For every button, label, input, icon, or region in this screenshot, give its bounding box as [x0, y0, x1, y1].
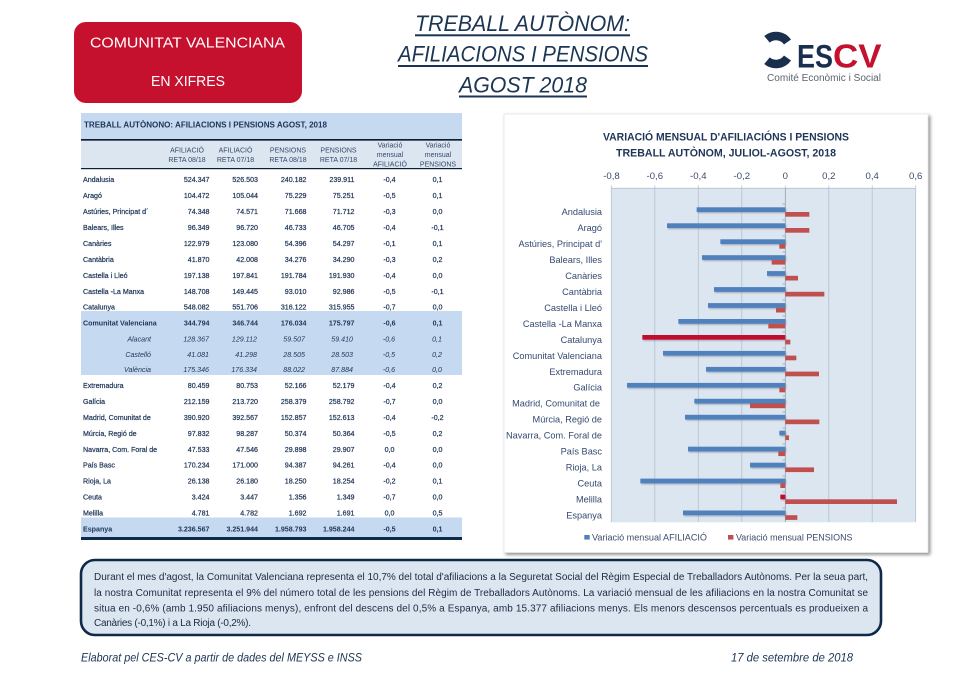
table rows: autonomous communities after Comunitat Valenciana: 3.424	[192, 493, 210, 501]
table rows: autonomous communities after Comunitat Valenciana: 4.782	[240, 509, 258, 517]
table rows: autonomous communities before Comunitat Valenciana: 0,0	[433, 304, 442, 312]
table rows: autonomous communities before Comunitat Valenciana: 96.720	[236, 224, 258, 232]
table rows: autonomous communities before Comunitat Valenciana: 0,0	[433, 208, 442, 216]
table rows: autonomous communities after Comunitat Valenciana: 0,0	[385, 446, 394, 454]
table rows: autonomous communities after Comunitat Valenciana: 0,0	[433, 461, 442, 469]
table rows: autonomous communities before Comunitat Valenciana: 149.445	[232, 288, 258, 296]
table rows: provinces: 59.410	[331, 335, 353, 343]
table rows: autonomous communities before Comunitat Valenciana: 96.349	[188, 224, 210, 232]
chart title: VARIACIÓ MENSUAL D'AFILIACIÓNS I PENSIONS	[603, 130, 849, 144]
table rows: autonomous communities after Comunitat Valenciana: 390.920	[184, 414, 210, 422]
table rows: autonomous communities before Comunitat Valenciana: 191.930	[329, 272, 355, 280]
title: TREBALL AUTÒNOM:	[415, 11, 630, 36]
callout: summary text: Canàries (-0,1%) i a La Rioja (-0,2%).	[94, 618, 251, 629]
table title band	[81, 113, 462, 139]
table row: Comunitat Valenciana	[83, 320, 442, 328]
x axis labels: 0,4	[866, 171, 880, 182]
table row: Espanya total: 1.958.793	[275, 525, 307, 533]
table rows: autonomous communities after Comunitat Valenciana: Extremadura	[83, 382, 124, 390]
table rows: autonomous communities after Comunitat Valenciana: 26.138	[188, 477, 210, 485]
table rows: autonomous communities after Comunitat Valenciana: 80.459	[188, 382, 210, 390]
table rows: autonomous communities before Comunitat Valenciana: 0,0	[433, 272, 442, 280]
table rows: autonomous communities before Comunitat Valenciana: 0,1	[433, 192, 442, 200]
table header row: RETA 07/18	[217, 157, 254, 164]
table row: Espanya total: 0,1	[433, 525, 442, 533]
table rows: autonomous communities after Comunitat Valenciana: 1.691	[337, 509, 355, 517]
table header row: PENSIONS	[420, 162, 456, 168]
table header row: Variació	[426, 142, 450, 150]
table rows: autonomous communities before Comunitat Valenciana: -0,5	[383, 288, 396, 296]
table row: Comunitat Valenciana: Comunitat Valenciana	[83, 320, 157, 328]
table row: Espanya total: Espanya	[83, 525, 112, 533]
x axis labels	[603, 171, 922, 182]
table rows: autonomous communities before Comunitat Valenciana: -0,3	[383, 208, 396, 216]
badge: Comunitat Valenciana en xifres: COMUNITAT VALENCIANA	[90, 36, 285, 52]
x axis labels: 0,6	[909, 171, 922, 182]
table header row: AFILIACIÓ	[373, 160, 407, 168]
chart legend: Variació mensual AFILIACIÓ	[592, 532, 707, 544]
table rows: autonomous communities after Comunitat Valenciana: 97.832	[188, 430, 210, 438]
table rows: autonomous communities after Comunitat Valenciana: Galícia	[83, 398, 105, 406]
category labels: Rioja, La	[566, 462, 603, 472]
table rows: autonomous communities after Comunitat Valenciana: 94.387	[285, 461, 307, 469]
table header row: RETA 08/18	[168, 157, 206, 164]
table header row: mensual	[377, 152, 404, 159]
callout: summary text: la nostra Comunitat representa el 9% del número total de les pensions del Règim de Treballadors Autònoms. La variació mensual de les afiliacions en la nostra Comunitat se	[94, 588, 868, 599]
table rows: autonomous communities before Comunitat Valenciana: 122.979	[184, 240, 210, 248]
table rows: autonomous communities after Comunitat Valenciana: 47.533	[188, 446, 210, 454]
table rows: autonomous communities before Comunitat Valenciana: -0,1	[431, 288, 444, 296]
table rows: autonomous communities after Comunitat Valenciana: Rioja, La	[83, 477, 111, 485]
table rows: autonomous communities after Comunitat Valenciana: -0,7	[383, 398, 396, 406]
table rows: autonomous communities after Comunitat Valenciana: 1.356	[289, 493, 307, 501]
table rows: autonomous communities before Comunitat Valenciana: 197.841	[232, 272, 258, 280]
table rows: autonomous communities before Comunitat Valenciana: -0,1	[383, 240, 396, 248]
table row: Comunitat Valenciana: 344.794	[184, 320, 210, 328]
table rows: provinces: 87.884	[331, 366, 353, 374]
table rows: provinces	[124, 335, 442, 374]
panel: data table	[81, 113, 462, 540]
category labels: Múrcia, Regió de	[533, 414, 602, 424]
table rows: autonomous communities after Comunitat Valenciana: 152.857	[281, 414, 307, 422]
table rows: autonomous communities after Comunitat Valenciana: 258.792	[329, 398, 355, 406]
table rows: autonomous communities after Comunitat Valenciana: Madrid, Comunitat de	[83, 414, 151, 422]
table rows: autonomous communities after Comunitat Valenciana: -0,4	[383, 461, 396, 469]
table row: Espanya total: 1.958.244	[323, 525, 355, 533]
table rows: autonomous communities before Comunitat Valenciana: 75.251	[333, 192, 355, 200]
table header row: AFILIACIÓ	[219, 146, 253, 154]
table rows: autonomous communities before Comunitat Valenciana: 54.297	[333, 240, 355, 248]
table rows: autonomous communities before Comunitat Valenciana: Canàries	[83, 240, 112, 248]
table rows: autonomous communities before Comunitat Valenciana: 74.348	[188, 208, 210, 216]
table rows: autonomous communities before Comunitat Valenciana: Balears, Illes	[83, 224, 124, 232]
table rows: autonomous communities before Comunitat Valenciana: 240.182	[281, 176, 307, 184]
table rows: autonomous communities after Comunitat Valenciana: 3.447	[240, 493, 258, 501]
table rows: autonomous communities after Comunitat Valenciana: -0,4	[383, 382, 396, 390]
category labels: Cantàbria	[562, 287, 603, 297]
table rows: autonomous communities after Comunitat Valenciana: 94.261	[333, 461, 355, 469]
table rows: autonomous communities after Comunitat Valenciana	[83, 382, 444, 517]
badge: Comunitat Valenciana en xifres	[74, 22, 302, 103]
table rows: autonomous communities before Comunitat Valenciana: 148.708	[184, 288, 210, 296]
table rows: autonomous communities before Comunitat Valenciana: 548.082	[184, 304, 210, 312]
table rows: autonomous communities before Comunitat Valenciana: 0,2	[433, 256, 442, 264]
table rows: provinces: Castelló	[125, 351, 151, 359]
table rows: autonomous communities after Comunitat Valenciana: 170.234	[184, 461, 210, 469]
category labels: Catalunya	[561, 335, 603, 345]
table rows: autonomous communities after Comunitat Valenciana: 18.250	[285, 477, 307, 485]
table rows: provinces: -0,6	[383, 335, 395, 343]
table rows: autonomous communities before Comunitat Valenciana: Cantàbria	[83, 256, 114, 264]
bars: variació mensual afiliació	[627, 207, 785, 515]
table rows: autonomous communities after Comunitat Valenciana: 258.379	[281, 398, 307, 406]
chart legend: Variació mensual PENSIONS	[736, 532, 852, 544]
title	[396, 11, 648, 98]
footer: source note: Elaborat pel CES-CV a partir de dades del MEYSS e INSS	[81, 652, 362, 664]
table header row: mensual	[425, 152, 452, 159]
table rows: autonomous communities before Comunitat Valenciana: -0,4	[383, 224, 396, 232]
table row: Espanya total: -0,5	[383, 525, 396, 533]
table rows: autonomous communities after Comunitat Valenciana: 212.159	[184, 398, 210, 406]
table header row	[81, 139, 462, 169]
table rows: provinces: 0,2	[432, 351, 442, 359]
table rows: autonomous communities after Comunitat Valenciana: 98.287	[236, 430, 258, 438]
table rows: provinces: València	[124, 366, 151, 374]
table rows: autonomous communities before Comunitat Valenciana: 34.276	[285, 256, 307, 264]
table rows: provinces: 28.503	[330, 351, 353, 359]
table rows: autonomous communities after Comunitat Valenciana: 52.166	[285, 382, 307, 390]
table rows: autonomous communities after Comunitat Valenciana: Melilla	[83, 509, 103, 517]
table rows: autonomous communities after Comunitat Valenciana: Navarra, Com. Foral de	[83, 446, 157, 454]
table rows: autonomous communities before Comunitat Valenciana: 316.122	[281, 304, 307, 312]
table rows: autonomous communities after Comunitat Valenciana: 26.180	[236, 477, 258, 485]
title: AGOST 2018	[457, 72, 587, 97]
table rows: provinces: 41.298	[235, 351, 257, 359]
table row: Comunitat Valenciana: 0,1	[433, 320, 442, 328]
category labels: Castella i Lleó	[544, 303, 602, 313]
x axis labels: -0,2	[734, 171, 750, 182]
table rows: autonomous communities after Comunitat Valenciana: -0,5	[383, 430, 396, 438]
category labels: Canàries	[565, 271, 602, 281]
table rows: autonomous communities after Comunitat Valenciana: 80.753	[236, 382, 258, 390]
table rows: autonomous communities before Comunitat Valenciana: 526.503	[232, 176, 258, 184]
table rows: autonomous communities after Comunitat Valenciana: 50.364	[333, 430, 355, 438]
category labels: País Basc	[561, 446, 602, 456]
table rows: autonomous communities before Comunitat Valenciana: 123.080	[232, 240, 258, 248]
table rows: provinces: 0,0	[432, 366, 442, 374]
table rows: autonomous communities before Comunitat Valenciana: Astúries, Principat d´	[83, 208, 148, 216]
table rows: autonomous communities before Comunitat Valenciana: 0,1	[433, 240, 442, 248]
table rows: autonomous communities before Comunitat Valenciana: Andalusia	[83, 176, 114, 184]
table header row: PENSIONS	[270, 148, 306, 154]
table rows: autonomous communities after Comunitat Valenciana: 0,0	[385, 509, 394, 517]
table row: Comunitat Valenciana: -0,6	[383, 320, 396, 328]
table rows: autonomous communities after Comunitat Valenciana: 29.907	[333, 446, 355, 454]
table rows: autonomous communities before Comunitat Valenciana: 239.911	[329, 176, 355, 184]
chart legend	[584, 532, 852, 544]
category labels: Castella -La Manxa	[523, 319, 603, 329]
callout: summary text	[81, 560, 881, 635]
table rows: autonomous communities after Comunitat Valenciana: 0,1	[433, 477, 442, 485]
table rows: autonomous communities before Comunitat Valenciana: 74.571	[236, 208, 258, 216]
table rows: autonomous communities before Comunitat Valenciana: 0,1	[433, 176, 442, 184]
table rows: autonomous communities after Comunitat Valenciana: 0,2	[433, 430, 442, 438]
table rows: autonomous communities after Comunitat Valenciana: 29.898	[285, 446, 307, 454]
category labels: Comunitat Valenciana	[513, 351, 603, 361]
table row: Comunitat Valenciana: 175.797	[329, 320, 355, 328]
table rows: provinces: 175.346	[183, 366, 209, 374]
table rows: autonomous communities before Comunitat Valenciana: 34.290	[333, 256, 355, 264]
table row: Espanya total: 3.251.944	[226, 525, 258, 533]
table rows: autonomous communities after Comunitat Valenciana: 0,0	[433, 493, 442, 501]
callout: summary text: situa en -0,6% (amb 1.950 afiliacions menys), enfront del descens del 0,5% a Espanya, amb 15.377 afiliacions menys. Els menors descensos percentuals es produeixen a	[94, 604, 868, 614]
table rows: provinces: 59.507	[283, 335, 306, 343]
logo: CES-CV: Comité Econòmic i Social	[767, 73, 881, 84]
table rows: autonomous communities after Comunitat Valenciana: 1.692	[289, 509, 307, 517]
table rows: autonomous communities before Comunitat Valenciana: Castella i Lleó	[83, 272, 128, 280]
table rows: provinces: 41.081	[187, 351, 209, 359]
table rows: autonomous communities after Comunitat Valenciana: 0,2	[433, 382, 442, 390]
table rows: autonomous communities before Comunitat Valenciana: -0,3	[383, 256, 396, 264]
table row: Comunitat Valenciana: 346.744	[232, 320, 258, 328]
bars: variació mensual pensions	[750, 212, 897, 520]
table header row: AFILIACIÓ	[170, 146, 204, 154]
table rows: autonomous communities after Comunitat Valenciana: 1.349	[337, 493, 355, 501]
table rows: autonomous communities after Comunitat Valenciana: 0,0	[433, 398, 442, 406]
table rows: autonomous communities after Comunitat Valenciana: -0,4	[383, 414, 396, 422]
table rows: provinces: -0,6	[383, 366, 395, 374]
table rows: autonomous communities after Comunitat Valenciana: 392.567	[232, 414, 258, 422]
table rows: autonomous communities before Comunitat Valenciana: 46.733	[285, 224, 307, 232]
table rows: autonomous communities before Comunitat Valenciana: 42.008	[236, 256, 258, 264]
table highlight bands	[81, 311, 462, 537]
table rows: autonomous communities after Comunitat Valenciana: 50.374	[285, 430, 307, 438]
table rows: provinces: Alacant	[126, 335, 152, 343]
category labels: Navarra, Com. Foral de	[506, 430, 602, 440]
table rows: autonomous communities after Comunitat Valenciana: -0,2	[431, 414, 444, 422]
category labels	[506, 207, 603, 520]
table rows: autonomous communities after Comunitat Valenciana: 0,5	[433, 509, 442, 517]
table header row: Variació	[378, 142, 402, 150]
table rows: autonomous communities before Comunitat Valenciana	[83, 176, 444, 312]
footer: date: 17 de setembre de 2018	[731, 652, 854, 664]
category labels: Espanya	[566, 510, 603, 520]
table rows: autonomous communities before Comunitat Valenciana: 71.712	[333, 208, 355, 216]
table rows: autonomous communities after Comunitat Valenciana: 213.720	[232, 398, 258, 406]
table rows: autonomous communities before Comunitat Valenciana: Aragó	[83, 192, 102, 200]
table rows: autonomous communities before Comunitat Valenciana: 92.986	[333, 288, 355, 296]
category labels: Extremadura	[549, 367, 603, 377]
table rows: autonomous communities after Comunitat Valenciana: País Basc	[83, 461, 115, 469]
category labels: Astúries, Principat d'	[519, 239, 602, 249]
x axis labels: 0	[783, 171, 788, 182]
category labels: Ceuta	[577, 478, 603, 488]
table rows: autonomous communities before Comunitat Valenciana: Castella -La Manxa	[83, 288, 144, 296]
table rows: autonomous communities before Comunitat Valenciana: 191.784	[281, 272, 307, 280]
table rows: autonomous communities after Comunitat Valenciana: Múrcia, Regió de	[83, 430, 137, 438]
table rows: autonomous communities after Comunitat Valenciana: -0,2	[383, 477, 396, 485]
badge: Comunitat Valenciana en xifres: EN XIFRES	[151, 74, 225, 90]
table rows: autonomous communities before Comunitat Valenciana: 41.870	[188, 256, 210, 264]
panel: bar chart card	[504, 114, 928, 552]
table rows: autonomous communities before Comunitat Valenciana: 104.472	[184, 192, 210, 200]
table rows: autonomous communities before Comunitat Valenciana: -0,1	[431, 224, 444, 232]
table title band: TREBALL AUTÒNONO: AFILIACIONS I PENSIONS AGOST, 2018	[84, 120, 328, 130]
table rows: autonomous communities before Comunitat Valenciana: -0,4	[383, 176, 396, 184]
table row: Comunitat Valenciana: 176.034	[281, 320, 307, 328]
table rows: provinces: 28.505	[282, 351, 305, 359]
category labels: Galícia	[573, 382, 603, 392]
table rows: provinces: 88.022	[283, 366, 305, 374]
table rows: autonomous communities after Comunitat Valenciana: 52.179	[333, 382, 355, 390]
title: AFILIACIONS I PENSIONS	[396, 42, 648, 67]
category labels: Andalusia	[562, 207, 603, 217]
table rows: autonomous communities before Comunitat Valenciana: 105.044	[232, 192, 258, 200]
table rows: autonomous communities after Comunitat Valenciana: 0,0	[433, 446, 442, 454]
x axis labels: -0,6	[647, 171, 663, 182]
x axis labels: -0,4	[690, 171, 707, 182]
table header row: RETA 07/18	[320, 157, 357, 164]
table header row: RETA 08/18	[269, 157, 307, 164]
table rows: autonomous communities before Comunitat Valenciana: 54.396	[285, 240, 307, 248]
table rows: autonomous communities before Comunitat Valenciana: 93.010	[285, 288, 307, 296]
table rows: autonomous communities after Comunitat Valenciana: 152.613	[329, 414, 355, 422]
table rows: autonomous communities before Comunitat Valenciana: 315.955	[329, 304, 355, 312]
logo: CES-CV: ES	[797, 39, 833, 75]
table row: Espanya total: 3.236.567	[178, 525, 210, 533]
chart title	[603, 130, 849, 160]
table rows: provinces: 129.112	[232, 335, 257, 343]
table rows: autonomous communities before Comunitat Valenciana: 524.347	[184, 176, 210, 184]
category labels: Madrid, Comunitat de	[512, 398, 600, 408]
table rows: provinces: 128.367	[183, 335, 210, 343]
logo: CES-CV: CV	[833, 38, 882, 75]
x axis labels: 0,2	[822, 171, 835, 182]
table rows: provinces: 176.334	[231, 366, 257, 374]
table rows: autonomous communities before Comunitat Valenciana: -0,5	[383, 192, 396, 200]
table rows: autonomous communities after Comunitat Valenciana: 18.254	[333, 477, 355, 485]
table rows: autonomous communities before Comunitat Valenciana: 46.705	[333, 224, 355, 232]
table rows: autonomous communities before Comunitat Valenciana: 551.706	[232, 304, 258, 312]
table rows: autonomous communities before Comunitat Valenciana: -0,4	[383, 272, 396, 280]
table rows: autonomous communities before Comunitat Valenciana: 75.229	[285, 192, 307, 200]
table rows: autonomous communities after Comunitat Valenciana: 4.781	[192, 509, 210, 517]
callout: summary text: Durant el mes d'agost, la Comunitat Valenciana representa el 10,7% del total d'afiliacions a la Seguretat Social del Règim Especial de Treballadors Autònoms. Per la seua part,	[94, 572, 868, 583]
table rows: provinces: 0,1	[432, 335, 442, 343]
table rows: autonomous communities before Comunitat Valenciana: -0,7	[383, 304, 396, 312]
table rows: autonomous communities before Comunitat Valenciana: 197.138	[184, 272, 210, 280]
chart title: TREBALL AUTÒNOM, JULIOL-AGOST, 2018	[616, 146, 836, 160]
x axis labels: -0,8	[603, 171, 620, 182]
table rows: autonomous communities after Comunitat Valenciana: Ceuta	[83, 493, 102, 501]
category labels: Aragó	[577, 223, 602, 233]
table rows: autonomous communities after Comunitat Valenciana: -0,7	[383, 493, 396, 501]
category labels: Melilla	[576, 494, 603, 504]
table row: Espanya total	[81, 525, 462, 540]
table rows: autonomous communities after Comunitat Valenciana: 171.000	[232, 461, 258, 469]
category labels: Balears, Illes	[549, 255, 602, 265]
table header row: PENSIONS	[320, 148, 357, 154]
table rows: autonomous communities before Comunitat Valenciana: 71.668	[285, 208, 307, 216]
logo: CES-CV	[767, 36, 882, 84]
table rows: provinces: -0,5	[383, 351, 395, 359]
plot background and gridlines	[611, 186, 916, 522]
table rows: autonomous communities after Comunitat Valenciana: 47.546	[236, 446, 258, 454]
table rows: autonomous communities before Comunitat Valenciana: Catalunya	[83, 304, 115, 312]
